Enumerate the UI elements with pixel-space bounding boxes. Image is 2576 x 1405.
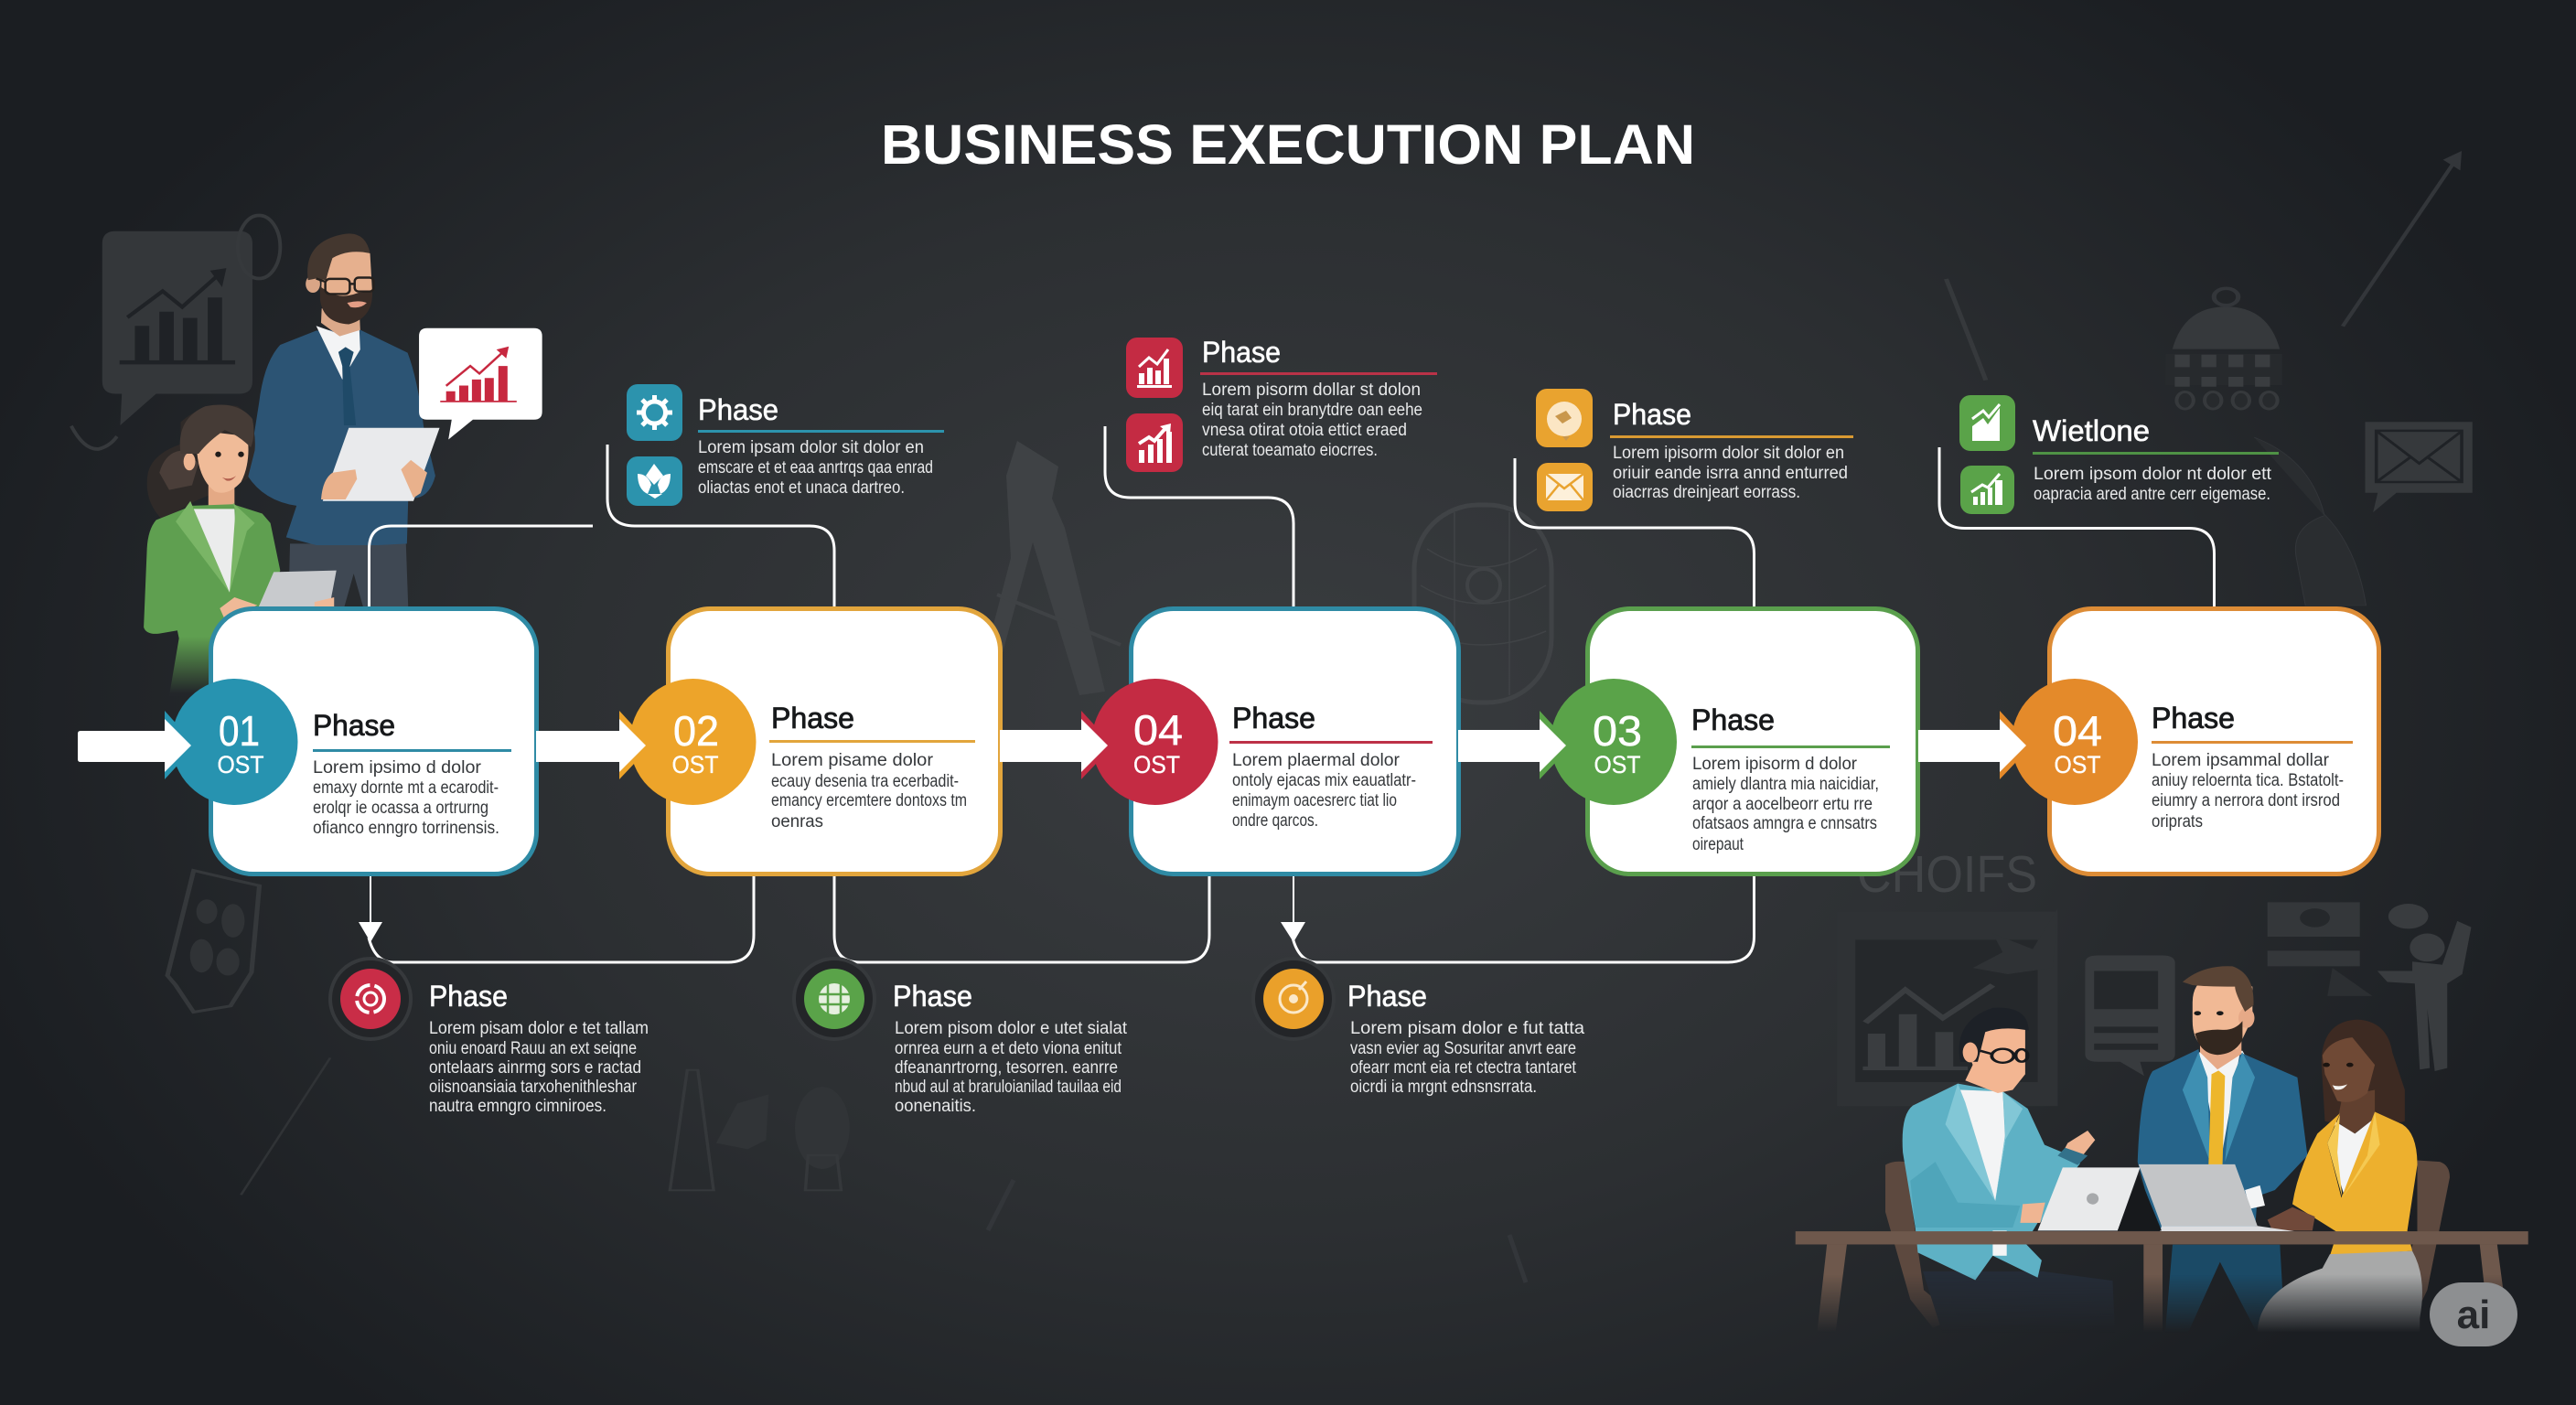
figure: bearded man xyxy=(248,233,440,608)
panel body: oapracia ared antre cerr eigemase. xyxy=(2034,485,2270,504)
icon: rising chart xyxy=(1126,338,1183,398)
laptops xyxy=(2038,1164,2295,1231)
connector: panel 1 to card 2 xyxy=(607,445,834,607)
panel: top milestone: Wietlone xyxy=(2033,414,2150,447)
card 3 body: ontoly ejacas mix eauatlatr- xyxy=(1232,771,1416,790)
panel: top phase 3 xyxy=(1536,389,1853,511)
icon: area chart xyxy=(1959,395,2015,451)
speech bubble with chart xyxy=(419,328,542,439)
connector: panel 2 to card 3 xyxy=(1105,426,1293,607)
panel body: ofearr mcnt eia ret ctectra tantaret xyxy=(1350,1058,1577,1078)
panel: bottom phase 3: Phase xyxy=(1347,980,1427,1013)
panel: top phase 1 xyxy=(627,384,944,506)
card 5 body: oriprats xyxy=(2152,812,2203,831)
icon: bars chart xyxy=(1960,466,2014,514)
panel body: oiacrras dreinjeart eorrass. xyxy=(1613,483,1800,502)
panel body: oniu enoard Rauu an ext seiqne xyxy=(429,1039,637,1058)
panel body: cuterat toeamato eiocrres. xyxy=(1202,441,1378,460)
icon: envelope xyxy=(1537,463,1593,511)
card 4 xyxy=(1588,609,1917,874)
ghost: globe xyxy=(1414,505,1551,702)
panel: bottom phase 3 xyxy=(1253,959,1584,1097)
panel body: vnesa otirat otoia ettict eraed xyxy=(1202,421,1407,440)
connector: card 4 loop xyxy=(1293,876,1755,962)
card 1 title: Phase xyxy=(313,709,395,742)
card 1 body: emaxy dornte mt a ecarodit- xyxy=(313,778,499,798)
card 2 body: ecauy desenia tra ecerbadit- xyxy=(771,772,959,791)
card 2 rule xyxy=(769,740,975,743)
panel body: Lorem pisom dolor e utet sialat xyxy=(895,1019,1128,1038)
ghost: word: CHOIFS xyxy=(1857,845,2037,904)
panel body: eiq tarat ein branytdre oan eehe xyxy=(1202,401,1422,420)
ghost background icons xyxy=(71,151,2473,1282)
connector: panel 3 to card 4 xyxy=(1515,458,1755,607)
card 4 body: Lorem ipisorm d dolor xyxy=(1692,755,1858,774)
milestone badge 01 xyxy=(78,679,298,805)
panel: top phase 1: Phase xyxy=(698,393,778,426)
card 3 body: Lorem plaermal dolor xyxy=(1232,751,1401,770)
connector: card 3 to bottom phase 3 xyxy=(1293,876,1294,924)
milestone badge 05 orange: 04 xyxy=(2053,707,2102,755)
card 1 body: Lorem ipsimo d dolor xyxy=(313,758,482,778)
panel body: Lorem ipsom dolor nt dolor ett xyxy=(2034,465,2272,484)
connector: card 1 to bottom phase 1 xyxy=(370,876,371,924)
people: presenter duo xyxy=(144,233,440,696)
card 5 body xyxy=(2152,751,2344,831)
panel body xyxy=(698,438,933,498)
card 3 body: enimaym oacesrerc tiat lio xyxy=(1232,791,1397,810)
figure: man in blue suit xyxy=(2138,966,2307,1334)
icon: dial xyxy=(1253,959,1334,1039)
icon: target xyxy=(330,959,411,1039)
card 3 body xyxy=(1232,751,1416,831)
panel body: nautra emngro cimniroes. xyxy=(429,1097,606,1116)
panel body: oliactas enot et unaca dartreo. xyxy=(698,478,905,498)
panel body xyxy=(895,1019,1128,1116)
panel body: vasn evier ag Sosuritar anvrt eare xyxy=(1350,1039,1576,1058)
card 4 rule xyxy=(1691,745,1890,748)
panel body: emscare et et eaa anrtrqs qaa enrad xyxy=(698,458,933,477)
milestone badge 05 orange: OST xyxy=(2055,751,2100,778)
ghost: small tick xyxy=(988,1180,1526,1282)
milestone badge 04 green: 03 xyxy=(1593,707,1642,755)
panel body xyxy=(1202,381,1422,460)
panel body: Lorem ipsam dolor sit dolor en xyxy=(698,438,924,457)
panel body xyxy=(1613,444,1848,502)
connector: panel 4 to card 5 xyxy=(1939,447,2214,607)
table xyxy=(1796,1231,2528,1334)
card 2 body xyxy=(771,751,967,831)
milestone badge 03 red: OST xyxy=(1133,751,1180,778)
icon: leaves xyxy=(627,456,682,506)
card 3 xyxy=(1131,609,1458,874)
arrow into badge 02 xyxy=(536,711,651,779)
card 5 body: eiumry a nerrora dont irsrod xyxy=(2152,791,2340,810)
card 5 title: Phase xyxy=(2152,702,2235,735)
panel: bottom phase 2 xyxy=(794,959,1128,1116)
milestone badge 03 red xyxy=(1000,679,1218,805)
panel body: Lorem pisam dolor e tet tallam xyxy=(429,1019,649,1038)
card 2 body: Lorem pisame dolor xyxy=(771,751,934,770)
ghost: chart bubble top left xyxy=(71,216,280,449)
card 3 title: Phase xyxy=(1232,702,1315,735)
figure: man in teal jacket xyxy=(1903,1008,2115,1334)
title: BUSINESS EXECUTION PLAN xyxy=(881,113,1695,176)
panel body: dfeananrtrorng, tesorren. eanrre xyxy=(895,1058,1118,1078)
panel body: Lorem ipisorm dolor sit dolor en xyxy=(1613,444,1844,463)
panel body: oonenaitis. xyxy=(895,1097,976,1116)
card 1 body: ofianco enngro torrinensis. xyxy=(313,819,499,838)
connectors xyxy=(369,426,2214,962)
card 4 body: arqor a aocelbeorr ertu rre xyxy=(1692,795,1873,814)
panel: top milestone xyxy=(1959,395,2279,514)
panel body: Lorem pisam dolor e fut tatta xyxy=(1350,1019,1584,1038)
milestone badge 02: OST xyxy=(671,751,719,778)
arrowhead: bottom phase 3 xyxy=(1281,922,1305,942)
card 1 rule xyxy=(313,749,511,752)
card 4 body xyxy=(1692,755,1879,854)
icon: globe xyxy=(794,959,875,1039)
panel: bottom phase 1: Phase xyxy=(429,980,508,1013)
card 5 body: aniuy reloernta tica. Bstatolt- xyxy=(2152,771,2344,790)
ai badge xyxy=(2430,1282,2517,1346)
milestone badge 04 green: OST xyxy=(1594,751,1641,778)
arrow into badge 03 green xyxy=(1458,711,1572,779)
milestone badge 02: 02 xyxy=(673,707,719,755)
card 3 rule xyxy=(1229,741,1433,744)
card 2 body: oenras xyxy=(771,812,823,831)
panel: top phase 3: Phase xyxy=(1613,398,1691,431)
ai badge: ai xyxy=(2457,1292,2490,1337)
arrowhead: bottom phase 1 xyxy=(359,922,382,942)
milestone badge 05 orange xyxy=(1918,679,2138,805)
panel body: Lorem pisorm dollar st dolon xyxy=(1202,381,1421,400)
ghost: dome and arrow top right xyxy=(1947,151,2473,606)
panel: bottom phase 1 xyxy=(330,959,649,1116)
arrow into badge 04 red xyxy=(1000,711,1113,779)
connector: card 1 top xyxy=(370,526,593,607)
panel body xyxy=(2034,465,2272,504)
card 4 title: Phase xyxy=(1691,703,1775,736)
figure: woman in green blazer xyxy=(144,405,337,696)
panel: bottom phase 2: Phase xyxy=(893,980,972,1013)
card 5 rule xyxy=(2152,741,2353,744)
card 2 body: emancy ercemtere dontoxs tm xyxy=(771,791,967,810)
card 1 body xyxy=(313,758,499,838)
ghost: bottom right board, bubble and figures xyxy=(1837,902,2471,1106)
panel body: ornrea eurn a et deto viona enitut xyxy=(895,1039,1122,1058)
icon: globe face xyxy=(1536,389,1593,447)
card 4 body: oirepaut xyxy=(1692,835,1744,854)
panel: top phase 2 xyxy=(1126,336,1437,472)
panel body xyxy=(429,1019,649,1116)
card 4 body: amiely dlantra mia naicidiar, xyxy=(1692,775,1879,794)
arrow into badge 04 orange xyxy=(1918,711,2032,779)
panel body xyxy=(1350,1019,1584,1097)
figure: woman in yellow jacket xyxy=(2258,1020,2422,1334)
panel body: oiisnoansiaia tarxohenithleshar xyxy=(429,1078,638,1097)
ghost: phone and tools bottom left xyxy=(167,871,850,1195)
card 2 title: Phase xyxy=(771,702,854,735)
panel body: nbud aul at braruloianilad tauilaa eid xyxy=(895,1078,1122,1097)
ghost: compass xyxy=(968,441,1121,723)
card 4 body: ofatsaos amngra e cnnsatrs xyxy=(1692,814,1877,833)
panel: top phase 2: Phase xyxy=(1202,336,1281,369)
connector: card 2 loop xyxy=(369,876,754,962)
card 1 body: erolqr ie ocassa a ortrurng xyxy=(313,799,488,818)
milestone badge 03 red: 04 xyxy=(1133,706,1183,754)
icon: growth arrow xyxy=(1126,413,1183,472)
milestone badge 01: OST xyxy=(218,751,263,778)
people: meeting table scene xyxy=(1796,966,2528,1334)
panel body: oicrdi ia mrgnt ednsnsrrata. xyxy=(1350,1078,1537,1097)
panel body: oriuir eande isrra annd enturred xyxy=(1613,464,1848,483)
card 3 body: ondre qarcos. xyxy=(1232,811,1318,831)
icon: gear xyxy=(627,384,682,441)
arrow into badge 01 xyxy=(78,711,196,779)
card 1 xyxy=(210,609,536,874)
milestone badge 04 green xyxy=(1458,679,1677,805)
card 5 xyxy=(2049,609,2378,874)
milestone badge 01: 01 xyxy=(219,707,260,755)
panel body: ontelaars ainrmg sors e ractad xyxy=(429,1058,641,1078)
milestone badge 02 xyxy=(536,679,756,805)
chairs xyxy=(1885,1160,2450,1327)
connector: card 2 to card 3 bottom loop xyxy=(834,876,1209,962)
card 2 xyxy=(668,609,1001,874)
card 5 body: Lorem ipsammal dollar xyxy=(2152,751,2330,770)
